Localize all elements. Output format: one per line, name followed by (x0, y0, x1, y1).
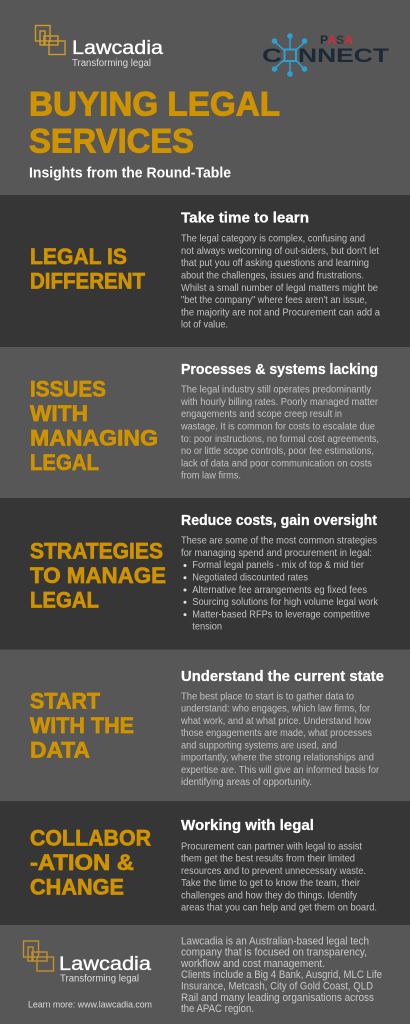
text block: working with legal: areas that you can help and get them on board. (181, 903, 377, 914)
subheading: take time to learn: Take time to learn (181, 210, 309, 227)
text block: take time to learn: not always welcoming of out-siders, but don't let (181, 246, 379, 257)
heading: start with the data: START (30, 689, 100, 714)
text block: take time to learn: The legal category is complex, confusing and (181, 234, 365, 245)
heading: collaboration and change: CHANGE (30, 874, 124, 899)
text block: understand the current state: importantly, where the strong relationships and (181, 753, 374, 764)
text block: processes and systems lacking: engagements and scope creep result in (181, 409, 342, 420)
text block: working with legal: resources and to prevent unnecessary waste. (181, 866, 366, 877)
heading: strategies to manage legal: TO MANAGE (30, 563, 166, 588)
icon: Lawcadia footer logo: Lawcadia (59, 953, 151, 975)
title (29, 86, 280, 161)
text block: working with legal: challenges and how they do things. Identify (181, 890, 358, 901)
text block: about Lawcadia: company that is focused on transparency, (181, 947, 367, 959)
text block: about Lawcadia: the APAC region. (181, 1003, 254, 1015)
panel: footer (0, 925, 410, 1024)
text block: understand the current state: expertise are. This will give an informed basis for (181, 765, 380, 776)
text block: about Lawcadia: Rail and many leading organisations across (181, 992, 374, 1004)
text block: understand the current state (180, 691, 380, 788)
text block: strategies intro and list: Formal legal panels - mix of top & mid tier (192, 560, 365, 571)
heading: issues with managing legal (30, 377, 158, 475)
icon: Lawcadia footer logo: Transforming legal (60, 974, 139, 985)
heading: strategies to manage legal: STRATEGIES (30, 539, 163, 564)
panel: strategies to manage legal (0, 498, 410, 650)
text block: working with legal (181, 841, 377, 914)
heading: issues with managing legal: LEGAL (30, 450, 99, 475)
subheading: reduce costs, gain oversight: Reduce costs, gain oversight (181, 512, 377, 529)
heading: collaboration and change (30, 826, 151, 899)
text block: take time to learn (181, 234, 380, 331)
subtitle: Insights from the Round-Table (29, 166, 231, 182)
text block: about Lawcadia (180, 935, 382, 1015)
text block: processes and systems lacking: no or little scope controls, poor fee estimations, (181, 446, 374, 457)
text block: about Lawcadia: Lawcadia is an Australian-based legal tech (181, 935, 369, 947)
text block: strategies intro and list: Matter-based RFPs to leverage competitive (192, 609, 370, 620)
text block: processes and systems lacking: with hourly billing rates. Poorly managed matter (180, 397, 379, 408)
heading: start with the data (30, 689, 134, 763)
icon: Lawcadia footer logo (24, 941, 151, 985)
text block: processes and systems lacking: The legal industry still operates predominantly (181, 385, 372, 396)
panel: start with the data (0, 650, 410, 801)
heading: issues with managing legal: WITH (30, 401, 88, 426)
text block: strategies intro and list: tension (192, 622, 222, 633)
text block: take time to learn: "bet the company" where fees aren't an issue, (181, 295, 367, 306)
heading: issues with managing legal: ISSUES (30, 377, 106, 402)
text block: take time to learn: lot of value. (181, 320, 228, 331)
heading: legal is different: DIFFERENT (30, 268, 145, 293)
text block: processes and systems lacking: wastage. It is common for costs to escalate due (180, 422, 375, 432)
text block: understand the current state: The best place to start is to gather data to (181, 691, 354, 702)
text block: take time to learn: about the challenges, issues and frustrations. (181, 270, 364, 282)
text block: strategies intro and list: Negotiated discounted rates (192, 572, 308, 584)
text block: understand the current state: understand: who engages, which law firms, for (181, 704, 371, 715)
text block: processes and systems lacking: lack of data and poor communication on costs (181, 458, 372, 469)
title: SERVICES (29, 123, 194, 161)
icon: PASA Connect logo: C (262, 46, 282, 67)
text block: about Lawcadia: Clients include a Big 4 Bank, Ausgrid, MLC Life (181, 969, 382, 981)
text block: strategies intro and list: Alternative fee arrangements eg fixed fees (192, 585, 367, 596)
text block: take time to learn: the majority are not and Procurement can add a (181, 307, 380, 318)
heading: strategies to manage legal (30, 539, 166, 612)
heading: legal is different (30, 244, 145, 293)
icon: PASA Connect logo: NNECT (298, 46, 390, 67)
text block: take time to learn: Whilst a small number of legal matters might be (181, 283, 378, 294)
text block: strategies intro and list: for managing spend and procurement in legal: (181, 548, 372, 559)
text block: understand the current state: those engagements are made, what processes (181, 728, 372, 739)
heading: issues with managing legal: MANAGING (30, 426, 158, 451)
text block: about Lawcadia: Insurance, Metcash, City of Gold Coast, QLD (181, 980, 373, 992)
text block: about Lawcadia: workflow and cost management. (180, 958, 325, 970)
icon: Lawcadia logo (36, 26, 163, 69)
text block: take time to learn: that put you off asking questions and learning (181, 258, 369, 269)
icon: Lawcadia logo: Lawcadia (72, 38, 163, 59)
icon: Lawcadia logo: Transforming legal (72, 58, 151, 69)
text block: working with legal: Procurement can partner with legal to assist (181, 841, 362, 852)
text block: strategies intro and list: Sourcing solutions for high volume legal work (192, 597, 379, 608)
panel: issues with managing legal (0, 347, 410, 498)
panel: collaboration and change (0, 801, 410, 925)
text block: understand the current state: and supporting systems are used, and (181, 740, 337, 751)
text block: processes and systems lacking (180, 385, 379, 482)
panel: legal is different (0, 195, 410, 347)
heading: start with the data: WITH THE (30, 713, 134, 738)
subheading: understand the current state: Understand the current state (181, 668, 384, 685)
text block: working with legal: them get the best results from their limited (181, 854, 355, 865)
icon: PASA Connect logo (262, 33, 390, 77)
header panel (0, 0, 410, 195)
icon: PASA Connect logo: PASA (320, 33, 353, 47)
text block: strategies intro and list (181, 536, 379, 633)
text block: understand the current state: what work, and at what price. Understand how (180, 716, 372, 727)
subheading: working with legal: Working with legal (181, 817, 314, 834)
heading: collaboration and change: COLLABOR (30, 826, 151, 851)
subheading: processes and systems lacking: Processes & systems lacking (181, 361, 378, 378)
heading: collaboration and change: -ATION & (30, 850, 134, 875)
heading: strategies to manage legal: LEGAL (30, 587, 99, 612)
heading: start with the data: DATA (30, 738, 90, 763)
learn more link: Learn more: www.lawcadia.com (28, 1000, 152, 1011)
text block: processes and systems lacking: to: poor instructions, no formal cost agreements, (181, 434, 379, 445)
text block: understand the current state: identifying areas of opportunity. (181, 777, 312, 788)
title: BUYING LEGAL (29, 86, 280, 124)
text block: processes and systems lacking: from law firms. (181, 471, 241, 482)
heading: legal is different: LEGAL IS (30, 244, 127, 269)
text block: strategies intro and list: These are some of the most common strategies (181, 536, 377, 547)
text block: working with legal: Take the time to get to know the team, their (181, 878, 361, 889)
